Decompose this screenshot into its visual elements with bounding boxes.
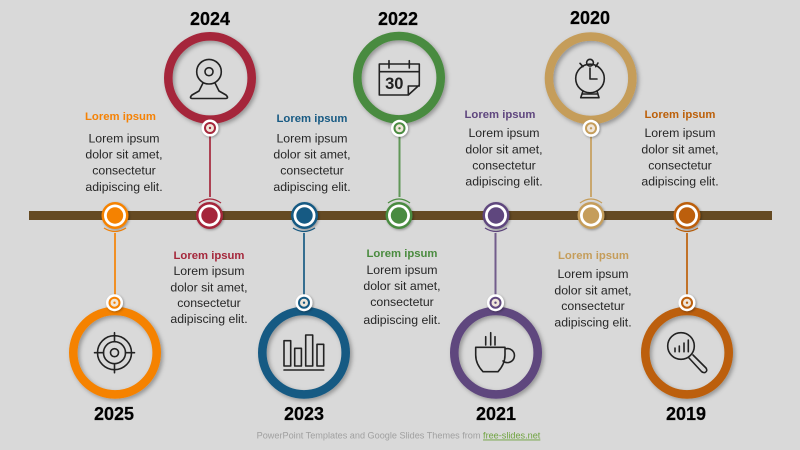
arc: 2024: [199, 199, 221, 203]
connector: 2021: [494, 233, 496, 296]
text: 2023: Lorem ipsum: [276, 132, 348, 146]
connector: 2024: [209, 134, 211, 197]
year: 2019: 2019: [666, 404, 706, 424]
pin: 2019: [678, 294, 696, 311]
milestone 2021: [454, 109, 543, 424]
text: 2020: consectetur: [561, 299, 625, 313]
text: 2019: Lorem ipsum: [644, 126, 716, 140]
node: 2021: [482, 202, 510, 229]
footer credit: PowerPoint Templates and Google Slides Themes from free-slides.net: [257, 430, 541, 440]
icon: coffee cup: [476, 333, 514, 372]
text: 2023: dolor sit amet,: [273, 148, 351, 162]
timeline bar: [29, 211, 772, 220]
icon: calendar: [379, 61, 419, 95]
year: 2024: 2024: [190, 9, 230, 29]
arc: 2019: [676, 228, 698, 232]
arc: 2021: [485, 228, 507, 232]
connector: 2025: [114, 233, 116, 296]
text: 2020: dolor sit amet,: [554, 284, 632, 298]
year: 2021: 2021: [476, 404, 516, 424]
text: 2025: dolor sit amet,: [85, 148, 163, 162]
milestone 2022: [357, 9, 441, 327]
label: 2024: Lorem ipsum: [174, 250, 244, 262]
text: 2022: dolor sit amet,: [363, 279, 441, 293]
ring: 2020: [549, 37, 632, 120]
arc: 2022: [388, 199, 410, 203]
label: 2022: Lorem ipsum: [367, 248, 437, 260]
year: 2023: 2023: [284, 404, 324, 424]
milestone 2019: [641, 109, 729, 424]
icon: stopwatch: [576, 59, 604, 98]
text: 2022: consectetur: [370, 295, 434, 309]
ring: 2021: [454, 311, 538, 394]
year: 2020: 2020: [570, 8, 610, 28]
text: 2020: adipiscing elit.: [554, 316, 632, 330]
pin: 2024: [202, 120, 218, 136]
text: 2021: adipiscing elit.: [465, 174, 543, 188]
text: 2024: dolor sit amet,: [170, 280, 248, 294]
ring: 2023: [262, 311, 346, 394]
text: 2019: adipiscing elit.: [641, 174, 719, 188]
label: 2021: Lorem ipsum: [465, 109, 535, 121]
arc: 2023: [293, 228, 315, 232]
calendar number: 30: [385, 75, 403, 93]
text: 2023: consectetur: [280, 164, 344, 178]
connector: 2023: [303, 233, 305, 296]
pin: 2021: [487, 294, 504, 311]
text: 2021: consectetur: [472, 158, 536, 172]
text: 2019: dolor sit amet,: [641, 142, 719, 156]
milestone 2023: [262, 113, 351, 424]
text: 2021: Lorem ipsum: [468, 126, 540, 140]
node: 2024: [196, 202, 223, 229]
icon: webcam: [190, 59, 228, 98]
icon: magnifier chart: [668, 333, 707, 373]
node: 2020: [578, 202, 604, 229]
connector: 2019: [686, 233, 688, 296]
node: 2022: [386, 202, 412, 229]
milestone 2024: [168, 9, 252, 326]
text: 2020: Lorem ipsum: [557, 267, 629, 281]
ring: 2019: [645, 311, 729, 394]
icon: bar chart: [284, 335, 324, 370]
node: 2023: [291, 202, 318, 229]
text: 2021: dolor sit amet,: [465, 142, 543, 156]
milestone 2025: [73, 111, 163, 424]
label: 2019: Lorem ipsum: [645, 109, 715, 121]
text: 2024: consectetur: [177, 296, 241, 310]
text: 2023: adipiscing elit.: [273, 180, 351, 194]
year: 2025: 2025: [94, 404, 134, 424]
pin: 2020: [582, 120, 600, 137]
text: 2022: adipiscing elit.: [363, 313, 441, 327]
pin: 2025: [106, 294, 123, 311]
ring: 2025: [73, 311, 157, 394]
node: 2025: [102, 202, 128, 229]
text: 2025: Lorem ipsum: [88, 132, 160, 146]
text: 2024: adipiscing elit.: [170, 312, 248, 326]
milestone 2020: [549, 8, 632, 330]
arc: 2025: [104, 228, 126, 232]
text: 2024: Lorem ipsum: [173, 264, 245, 278]
text: 2025: consectetur: [92, 164, 156, 178]
pin: 2023: [296, 294, 312, 311]
label: 2020: Lorem ipsum: [558, 250, 629, 262]
label: 2025: Lorem ipsum: [85, 111, 156, 123]
connector: 2022: [398, 134, 400, 197]
connector: 2020: [590, 134, 592, 197]
pin: 2022: [391, 120, 408, 137]
text: 2022: Lorem ipsum: [366, 263, 438, 277]
year: 2022: 2022: [378, 9, 418, 29]
icon: target: [94, 333, 134, 373]
node: 2019: [674, 202, 700, 229]
text: 2025: adipiscing elit.: [85, 180, 163, 194]
label: 2023: Lorem ipsum: [277, 113, 347, 125]
arc: 2020: [580, 199, 602, 203]
ring: 2024: [168, 36, 252, 120]
text: 2019: consectetur: [648, 158, 712, 172]
ring: 2022: [357, 36, 441, 119]
